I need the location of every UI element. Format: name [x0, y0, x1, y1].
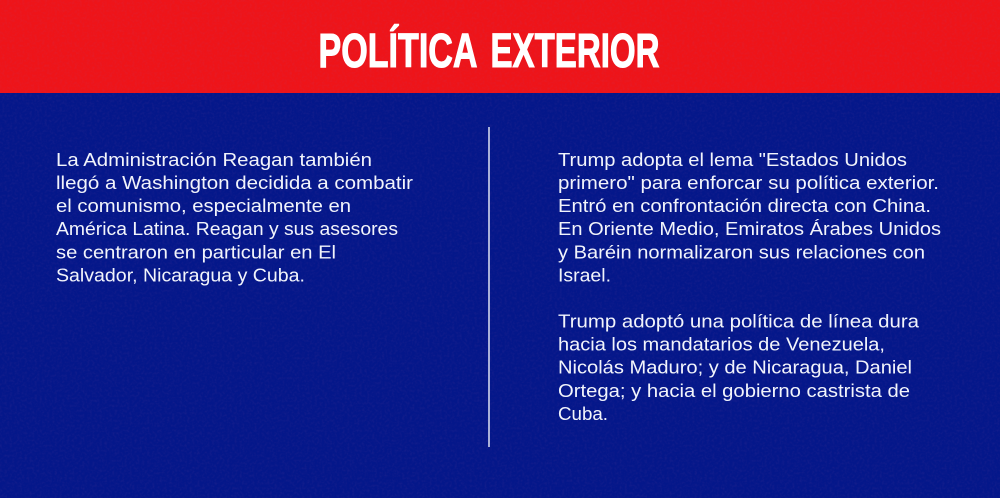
- text block: Trump first paragraph: Trump adopta el lema "Estados Unidos: [558, 149, 907, 170]
- text block: Trump first paragraph: En Oriente Medio, Emiratos Árabes Unidos: [558, 218, 941, 239]
- text block: Reagan foreign policy: Salvador, Nicaragua y Cuba.: [56, 264, 305, 286]
- text block: Reagan foreign policy: se centraron en particular en El: [56, 242, 336, 262]
- text block: Trump second paragraph: Nicolás Maduro; y de Nicaragua, Daniel: [558, 356, 912, 378]
- title: EXTERIOR: [490, 25, 660, 78]
- text block: Trump second paragraph: Ortega; y hacia el gobierno castrista de: [558, 380, 910, 401]
- text block: Reagan foreign policy: llegó a Washington decidida a combatir: [56, 172, 413, 193]
- text block: Trump first paragraph: [558, 149, 941, 286]
- text block: Reagan foreign policy: el comunismo, especialmente en: [56, 195, 351, 216]
- text block: Reagan foreign policy: América Latina. Reagan y sus asesores: [56, 218, 398, 239]
- text block: Trump first paragraph: primero" para enforcar su política exterior.: [558, 172, 939, 193]
- text block: Trump second paragraph: hacia los mandatarios de Venezuela,: [558, 334, 885, 354]
- text block: Trump second paragraph: Cuba.: [558, 403, 608, 424]
- text block: Trump second paragraph: [558, 310, 920, 424]
- text block: Reagan foreign policy: [56, 149, 413, 286]
- column divider: [488, 127, 490, 447]
- text block: Trump second paragraph: Trump adoptó una política de línea dura: [558, 310, 920, 332]
- title: POLÍTICA: [318, 24, 478, 78]
- text block: Trump first paragraph: Entró en confrontación directa con China.: [558, 195, 931, 216]
- header: red banner: [0, 0, 1000, 93]
- text block: Reagan foreign policy: La Administración Reagan también: [56, 149, 372, 170]
- text block: Trump first paragraph: y Baréin normalizaron sus relaciones con: [558, 242, 925, 262]
- text block: Trump first paragraph: Israel.: [558, 264, 611, 286]
